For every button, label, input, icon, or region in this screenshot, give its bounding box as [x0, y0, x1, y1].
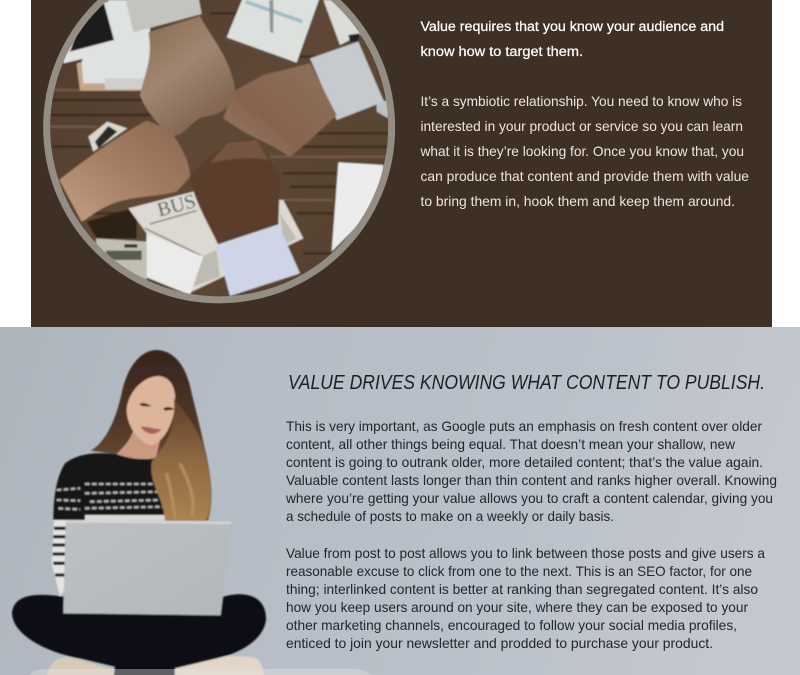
panel: translucent bottom bar [30, 669, 372, 675]
text: lower paragraph two: other marketing channels, encouraged to follow your social media profiles, [286, 617, 737, 633]
small diamond object [88, 122, 127, 152]
photo: fist bump in circular frame [43, 0, 397, 303]
text: top lead paragraph [420, 19, 724, 60]
right sleeve [310, 42, 384, 120]
top fist [140, 16, 235, 136]
text: top body paragraph: what it is they’re looking for. Once you know that, you [420, 144, 744, 159]
bottom fist [190, 150, 280, 245]
sweater body [53, 453, 207, 520]
left arm [59, 121, 190, 222]
photo: woman with laptop [12, 350, 266, 675]
sweater pattern [57, 484, 163, 509]
text: lower paragraph one: This is very important, as Google puts an emphasis on fresh content over older [286, 418, 762, 434]
top-left papers [76, 61, 142, 92]
text: lower paragraph two: how you keep users around on your site, where they can be exposed to your [286, 599, 748, 615]
shoes [47, 657, 115, 675]
image frame ring [47, 0, 391, 299]
text: lower paragraph one: where you’re getting your value allows you to craft a content calendar, giving you [285, 490, 773, 506]
text: top body paragraph: It’s a symbiotic relationship. You need to know who is [420, 94, 742, 109]
white bottom paper [145, 233, 203, 295]
photo: fist bump in circular frame: BUS [155, 190, 198, 221]
text: lower paragraph two: thing; interlinked content is better at ranking than segregated content. It’s also [286, 581, 758, 597]
calculator [96, 238, 147, 280]
top-right laptop [322, 0, 361, 46]
text: lower paragraph one: Valuable content lasts longer than thin content and ranks higher overall. Knowing [286, 472, 777, 488]
text: lower paragraph one [285, 418, 777, 524]
neck and chest [117, 430, 160, 459]
hair back [91, 350, 212, 521]
striped sleeve [52, 520, 67, 597]
text: lower paragraph two [286, 545, 765, 651]
text: top lead paragraph: know how to target them. [420, 44, 583, 60]
text: lower paragraph one: content is going to outrank older, more detailed content; that’s the value again. [286, 454, 763, 470]
hair front locks [151, 398, 211, 521]
text: top lead paragraph: Value requires that you know your audience and [420, 19, 724, 35]
laptop [63, 520, 232, 615]
panel: brown top section [31, 0, 772, 327]
text: lower paragraph one: a schedule of posts to make on a weekly or daily basis. [286, 508, 614, 524]
text: top body paragraph: can produce that content and provide them with value [420, 169, 749, 184]
panel: lower section background [0, 327, 800, 675]
text: top body paragraph: to bring them in, hook them and keep them around. [420, 194, 735, 209]
newspaper [128, 192, 303, 293]
top-left sleeve [125, 0, 202, 32]
white hem [85, 515, 165, 521]
face [127, 376, 175, 446]
top invoice [223, 38, 274, 56]
text: lower paragraph one: content, all other things being equal. That doesn’t mean your shallow, new [286, 436, 736, 452]
text: lower paragraph two: enticed to join your newsletter and prodded to purchase your product. [286, 635, 713, 651]
text: lower paragraph two: Value from post to post allows you to link between those posts and give users a [286, 545, 765, 561]
text: lower paragraph two: reasonable excuse to click from one to the next. This is an SEO factor, for one [286, 563, 752, 579]
legs [12, 594, 266, 675]
text: top body paragraph [420, 94, 749, 209]
bottom cuff [216, 224, 300, 296]
white paper right [332, 162, 383, 252]
right fist [223, 63, 337, 157]
text: top body paragraph: interested in your product or service so you can learn [420, 119, 743, 134]
